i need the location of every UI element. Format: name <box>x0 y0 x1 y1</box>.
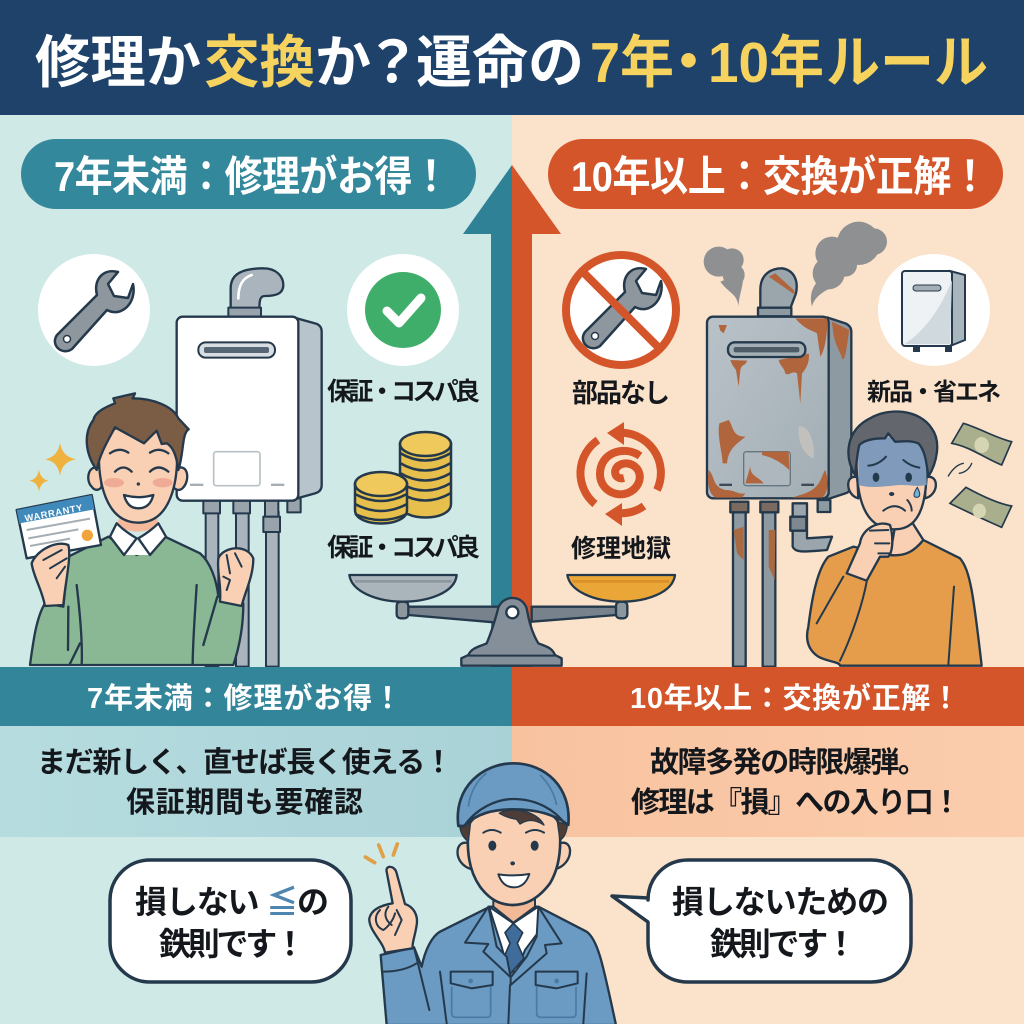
title text: か <box>315 31 371 95</box>
arrow: orange upward <box>512 165 561 668</box>
worker pointing <box>365 763 616 1024</box>
blue worried shade <box>858 437 927 487</box>
exhaust elbow <box>231 268 283 310</box>
spark lines <box>365 844 397 863</box>
ears <box>88 467 187 490</box>
hair <box>848 412 937 477</box>
strip right: 10年以上：交換が正解！ <box>630 681 960 715</box>
rust patches <box>708 318 828 498</box>
right pan <box>567 575 675 602</box>
heater side <box>827 317 851 499</box>
heater front <box>707 317 829 498</box>
right speech bubble <box>612 860 911 982</box>
face <box>99 423 177 523</box>
title text: 修理か <box>35 31 201 95</box>
left speech bubble: 鉄則です！ <box>159 926 306 962</box>
label: warranty and value second: 保証・コスパ良 <box>327 534 480 562</box>
title text: 交換 <box>204 31 315 95</box>
happy eyes, brows and mouth <box>104 450 173 508</box>
text block right <box>512 726 1024 837</box>
pipes <box>730 500 832 667</box>
warranty card: WARRANTY <box>24 502 84 524</box>
icon: repair spiral <box>580 422 661 526</box>
lapels <box>465 907 562 985</box>
water heater: rusty with smoke <box>704 222 887 667</box>
title text: 10年 <box>708 31 824 95</box>
heading pill: under 7 years: 7年未満：修理がお得！ <box>54 154 450 200</box>
exhaust elbow <box>760 268 797 308</box>
title text: ルール <box>826 31 988 95</box>
heater front <box>177 317 298 501</box>
text block right: 故障多発の時限爆弾。 <box>650 746 927 779</box>
jacket <box>381 907 616 1024</box>
strip left: 7年未満：修理がお得！ <box>87 681 402 715</box>
title text <box>35 31 988 95</box>
icon: green check <box>347 254 459 366</box>
right background panel <box>512 115 1024 1024</box>
title banner <box>0 0 1024 115</box>
panel: scale <box>349 575 675 666</box>
right fist <box>218 548 253 606</box>
text block left: まだ新しく、直せば長く使える！ <box>37 746 453 779</box>
left background panel <box>0 115 512 1024</box>
label: no parts: 部品なし <box>572 378 670 408</box>
stand <box>461 598 562 666</box>
face details <box>483 830 544 887</box>
warranty card <box>17 495 101 558</box>
sparkles <box>29 443 76 492</box>
left speech bubble <box>110 860 351 982</box>
face <box>468 806 560 905</box>
sweater <box>807 540 982 666</box>
title text: ？ <box>364 31 421 95</box>
hair <box>460 810 567 842</box>
hair <box>87 393 189 470</box>
heater side <box>293 317 322 499</box>
neck <box>116 517 159 532</box>
label: new and energy saving: 新品・省エネ <box>867 379 1001 406</box>
heading pill: over 10 years <box>548 139 1003 209</box>
collar <box>110 523 166 555</box>
face <box>856 435 927 529</box>
title text: 7年 <box>590 31 674 95</box>
ears <box>848 477 936 498</box>
icon: new energy saving heater <box>878 254 990 366</box>
man with warranty card <box>17 393 253 665</box>
falling money <box>948 423 1012 527</box>
neck <box>493 898 535 923</box>
shirt and tie <box>489 907 540 972</box>
icon: no wrench sign <box>566 255 676 365</box>
worried face details <box>868 457 920 511</box>
pockets <box>451 972 578 1017</box>
water heater: new <box>177 268 322 667</box>
title text: ・ <box>660 31 717 95</box>
ears <box>457 843 570 869</box>
panel: left scene illustration <box>17 254 480 667</box>
vent <box>198 342 275 358</box>
arrow: teal upward <box>463 165 512 668</box>
strip right <box>512 667 1024 726</box>
heading pill: under 7 years <box>21 139 476 209</box>
forearm and hand <box>847 524 892 581</box>
right speech bubble: 鉄則です！ <box>710 926 857 962</box>
icon: wrench <box>38 254 150 366</box>
control panel <box>214 452 260 486</box>
panel: right scene illustration <box>566 222 1012 667</box>
cap <box>458 763 569 826</box>
title text: 運命の <box>416 31 584 95</box>
left speech bubble: 損しない ≦の <box>135 884 329 920</box>
text block right: 修理は『損』への入り口！ <box>631 786 961 819</box>
left hand <box>32 544 69 606</box>
vent <box>728 342 805 357</box>
text block left: 保証期間も要確認 <box>126 786 363 819</box>
neck <box>890 522 923 555</box>
strip left <box>0 667 512 726</box>
label: repair hell: 修理地獄 <box>571 535 671 563</box>
text block left <box>0 726 512 837</box>
heading pill: over 10 years: 10年以上：交換が正解！ <box>571 154 989 200</box>
beam <box>397 602 627 623</box>
control panel <box>744 452 790 486</box>
pipes below heater <box>203 498 301 667</box>
right speech bubble: 損しないための <box>672 884 889 920</box>
sweater <box>30 537 243 665</box>
smoke <box>704 222 887 307</box>
worried man <box>807 412 1012 666</box>
left pan <box>349 575 457 602</box>
icon: coin stacks <box>355 432 451 524</box>
label: warranty and value: 保証・コスパ良 <box>327 378 480 406</box>
pointing hand <box>369 867 417 953</box>
